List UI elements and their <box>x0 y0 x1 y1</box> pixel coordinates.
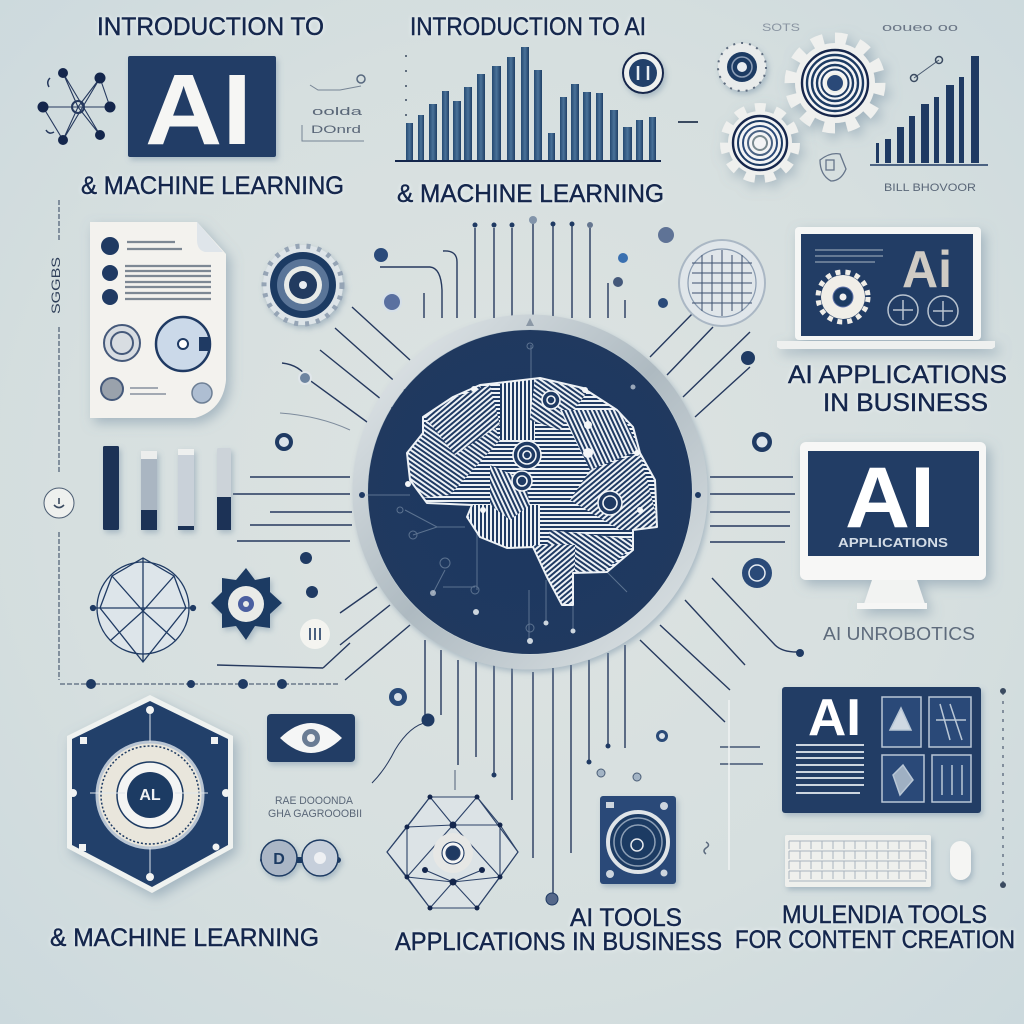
left dashed line node icon <box>44 488 74 518</box>
laptop screen text lines <box>815 250 883 262</box>
icon: gears <box>718 39 879 177</box>
small blurry note beside AI badge: DOnrd <box>311 124 361 136</box>
icon: wireframe globe top right of centre <box>679 240 765 326</box>
icon: battery bars <box>103 446 231 530</box>
icon: network polygon <box>387 770 518 910</box>
heading: AI applications in business: IN BUSINESS <box>823 389 988 417</box>
icon: keyboard <box>785 835 931 887</box>
small caption beside eye button: RAE DOOONDA <box>275 795 354 807</box>
small caption under top right chart: BILL BHOVOOR <box>884 182 976 194</box>
icon: lens gear <box>263 245 343 325</box>
dashed right border line <box>1000 688 1006 888</box>
panel: AI hexagon badge <box>67 695 233 893</box>
silver ring <box>360 322 700 662</box>
panel: document <box>90 222 226 418</box>
icon: paired coins <box>261 840 338 876</box>
faint captions above gears: SOTS <box>762 22 800 34</box>
laptop small icons <box>888 295 958 326</box>
icon: neural network <box>38 68 116 145</box>
panel: AI badge: AI <box>145 54 252 166</box>
laptop AI label: Ai <box>902 241 952 299</box>
vertical small label: SGGBS <box>49 257 63 314</box>
bar chart: top right <box>870 56 988 165</box>
panel: laptop <box>777 227 995 349</box>
heading: AI applications in business: AI APPLICATIONS <box>788 361 1007 389</box>
small caption beside eye button <box>268 795 362 820</box>
small blurry note beside AI badge: oolda <box>312 106 364 118</box>
icon: mouse <box>950 841 971 880</box>
heading: machine learning centre: & MACHINE LEARNING <box>397 180 664 208</box>
panel: AI badge <box>128 54 276 166</box>
gear: large <box>791 39 879 127</box>
title: left heading top: INTRODUCTION TO <box>97 13 324 41</box>
heading: multimedia tools <box>735 901 1015 954</box>
heading: AI applications in business <box>788 361 1007 417</box>
card thumbnails <box>882 697 971 802</box>
brain outline <box>407 378 657 605</box>
small squiggle icon <box>704 842 708 854</box>
icon: eye button <box>267 714 355 762</box>
bar chart: centre <box>395 47 698 161</box>
small caption under monitor: AI UNROBOTICS <box>823 624 975 644</box>
small caption beside eye button: GHA GAGROOOBII <box>268 808 362 820</box>
card text lines <box>796 745 864 793</box>
central disc with brain <box>359 318 701 662</box>
gear: small <box>718 43 766 91</box>
hexagon nodes <box>69 706 230 881</box>
icon: circle badge <box>623 53 663 93</box>
connector lines radiating from the central brain <box>217 222 797 893</box>
icon: paired coins: D <box>273 851 285 868</box>
title: centre heading: INTRODUCTION TO AI <box>410 13 646 41</box>
brain core swirls <box>512 391 622 515</box>
gear: medium <box>726 109 794 177</box>
heading: machine learning left: & MACHINE LEARNING <box>81 172 344 200</box>
dashed left border line <box>59 200 340 684</box>
monitor small label: APPLICATIONS <box>838 535 948 550</box>
icon: lens tile <box>600 796 676 884</box>
heading: applications in business: APPLICATIONS IN BUSINESS <box>395 928 722 956</box>
small connector node dots <box>86 216 804 905</box>
icon: star gear <box>211 568 282 640</box>
faint captions above gears: ooueo oo <box>882 22 958 34</box>
heading: AI tools: AI TOOLS <box>570 904 682 932</box>
document text lines <box>125 242 211 299</box>
document bullet icons <box>101 237 119 305</box>
card AI label: AI <box>808 689 861 747</box>
brain with circuit stripes <box>408 379 656 604</box>
document mini graphics <box>101 317 212 403</box>
faint captions above gears <box>762 22 958 34</box>
ring side nodes <box>359 318 701 498</box>
laptop gear <box>818 272 868 322</box>
panel: content tools card <box>782 687 981 813</box>
navy disc <box>368 330 692 654</box>
icon: wire sphere <box>90 558 196 662</box>
small blurry note beside AI badge <box>302 75 365 141</box>
icon: shield <box>820 154 846 181</box>
brain nodes <box>405 386 643 513</box>
hexagon AL label: AL <box>139 787 161 804</box>
monitor AI label: AI <box>845 450 935 546</box>
icon: white badge <box>300 619 330 649</box>
heading: machine learning bottom: & MACHINE LEARNING <box>50 924 319 952</box>
heading: multimedia tools: MULENDIA TOOLS <box>782 901 987 929</box>
panel: desktop monitor <box>800 442 986 609</box>
circuit traces in disc <box>366 343 627 640</box>
